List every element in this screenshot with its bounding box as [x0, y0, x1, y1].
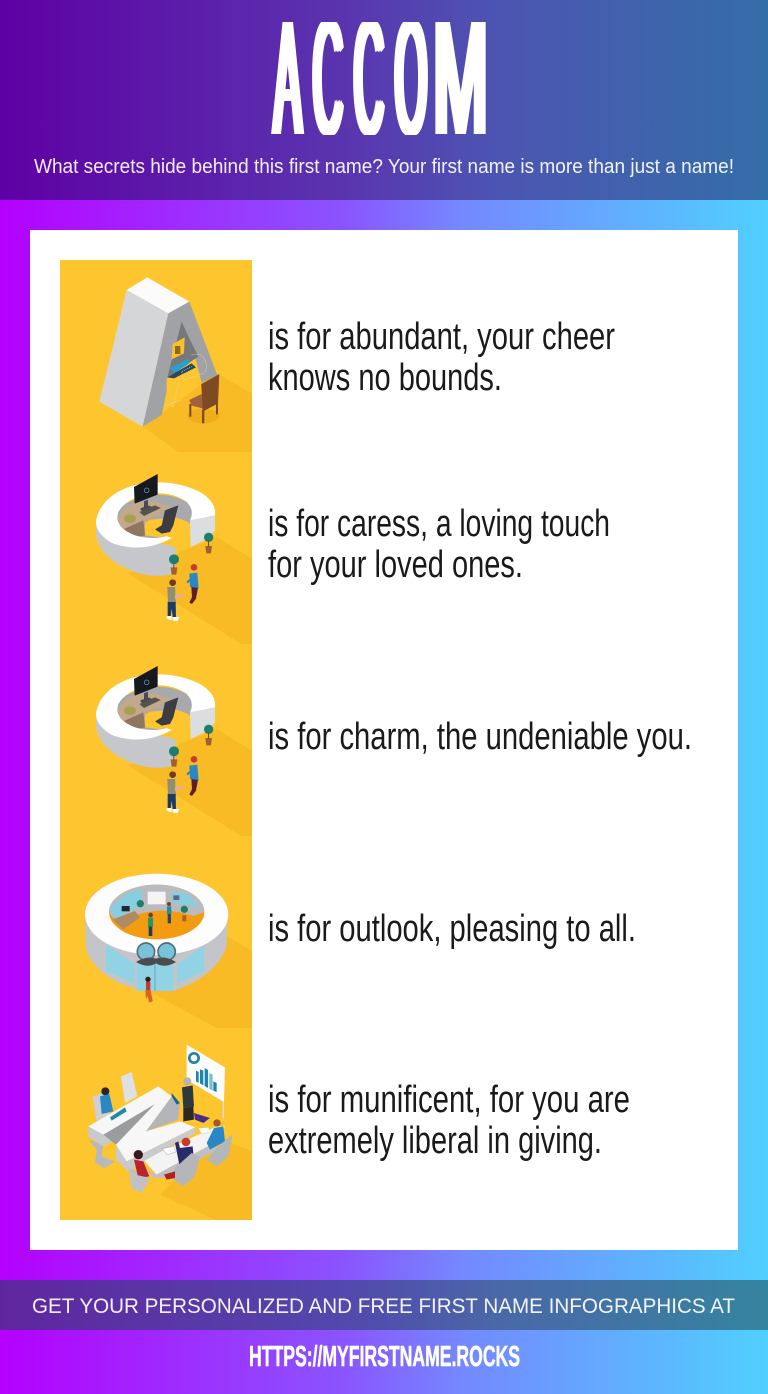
icon: letter M meeting table: [88, 1045, 252, 1220]
text: C caress: is for caress, a loving touch: [268, 503, 610, 545]
subtitle: What secrets hide behind this first name? Your first name is more than just a name!: [34, 156, 734, 178]
text: C caress: for your loved ones.: [268, 544, 523, 586]
yellow illustration column: [60, 260, 252, 1220]
footer band: [0, 1280, 768, 1330]
text: M munificent: is for munificent, for you are: [268, 1079, 630, 1121]
text: M munificent: extremely liberal in giving.: [268, 1120, 602, 1162]
footer url: HTTPS://MYFIRSTNAME.ROCKS: [249, 1341, 520, 1373]
footer call to action: GET YOUR PERSONALIZED AND FREE FIRST NAME INFOGRAPHICS AT: [32, 1295, 735, 1318]
whiteboard: [187, 1045, 225, 1119]
main white panel: [30, 230, 738, 1250]
text: A: is for abundant, your cheer: [268, 316, 615, 358]
text: M munificent: [268, 1079, 630, 1162]
icon: letter C reception desk 1: [96, 474, 252, 644]
header band: [0, 0, 768, 200]
text: O outlook: is for outlook, pleasing to all.: [268, 908, 636, 950]
text: C caress: [268, 503, 610, 586]
icon: letter O optician shop: [85, 874, 252, 1028]
text: A: knows no bounds.: [268, 357, 502, 399]
icon: letter A with desk and chair: [99, 277, 252, 452]
title: [271, 22, 486, 135]
icon: letter C reception desk 2: [96, 666, 252, 836]
text: A: [268, 316, 615, 399]
